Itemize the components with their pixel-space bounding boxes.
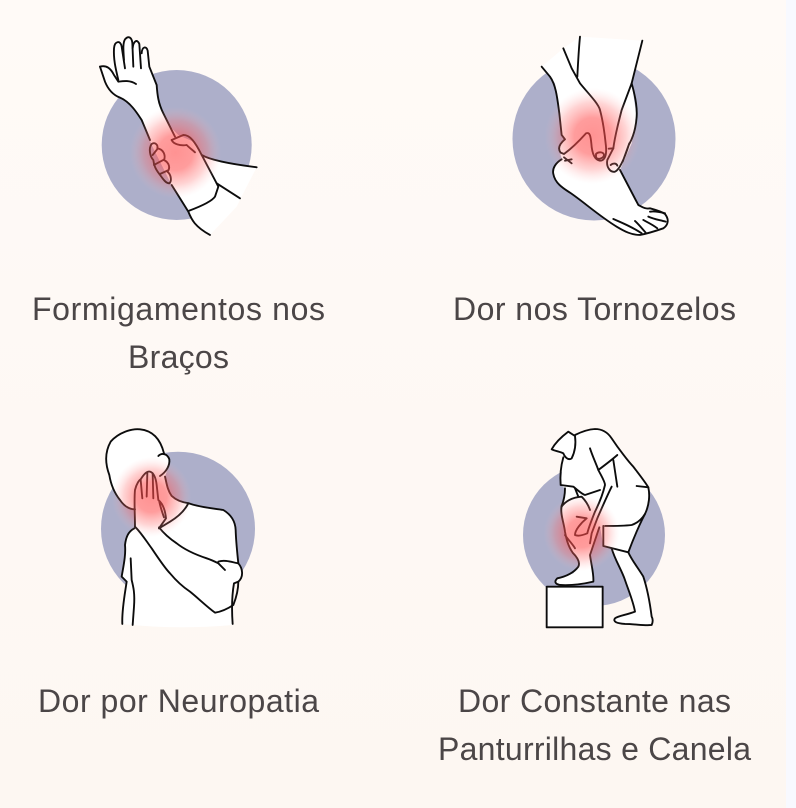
panel: arm tingling: [32, 37, 325, 375]
label: calf and shin pain: Dor Constante nas: [458, 683, 731, 719]
icon: neck with pain: [101, 429, 255, 627]
label: arm tingling: [32, 291, 325, 375]
label: arm tingling: Braços: [128, 339, 229, 375]
icon: ankle with pain: [512, 37, 676, 235]
panel: calf and shin pain: [438, 429, 751, 767]
label: calf and shin pain: [438, 683, 751, 767]
panel: ankle pain: [453, 37, 736, 327]
label: ankle pain: Dor nos Tornozelos: [453, 291, 736, 327]
label: calf and shin pain: Panturrilhas e Canela: [438, 731, 751, 767]
label: arm tingling: Formigamentos nos: [32, 291, 325, 327]
label: neuropathy pain: Dor por Neuropatia: [38, 683, 319, 719]
icon: leg with pain: [523, 429, 665, 627]
panel: neuropathy pain: [38, 429, 319, 719]
icon: arm with pain: [100, 37, 257, 235]
